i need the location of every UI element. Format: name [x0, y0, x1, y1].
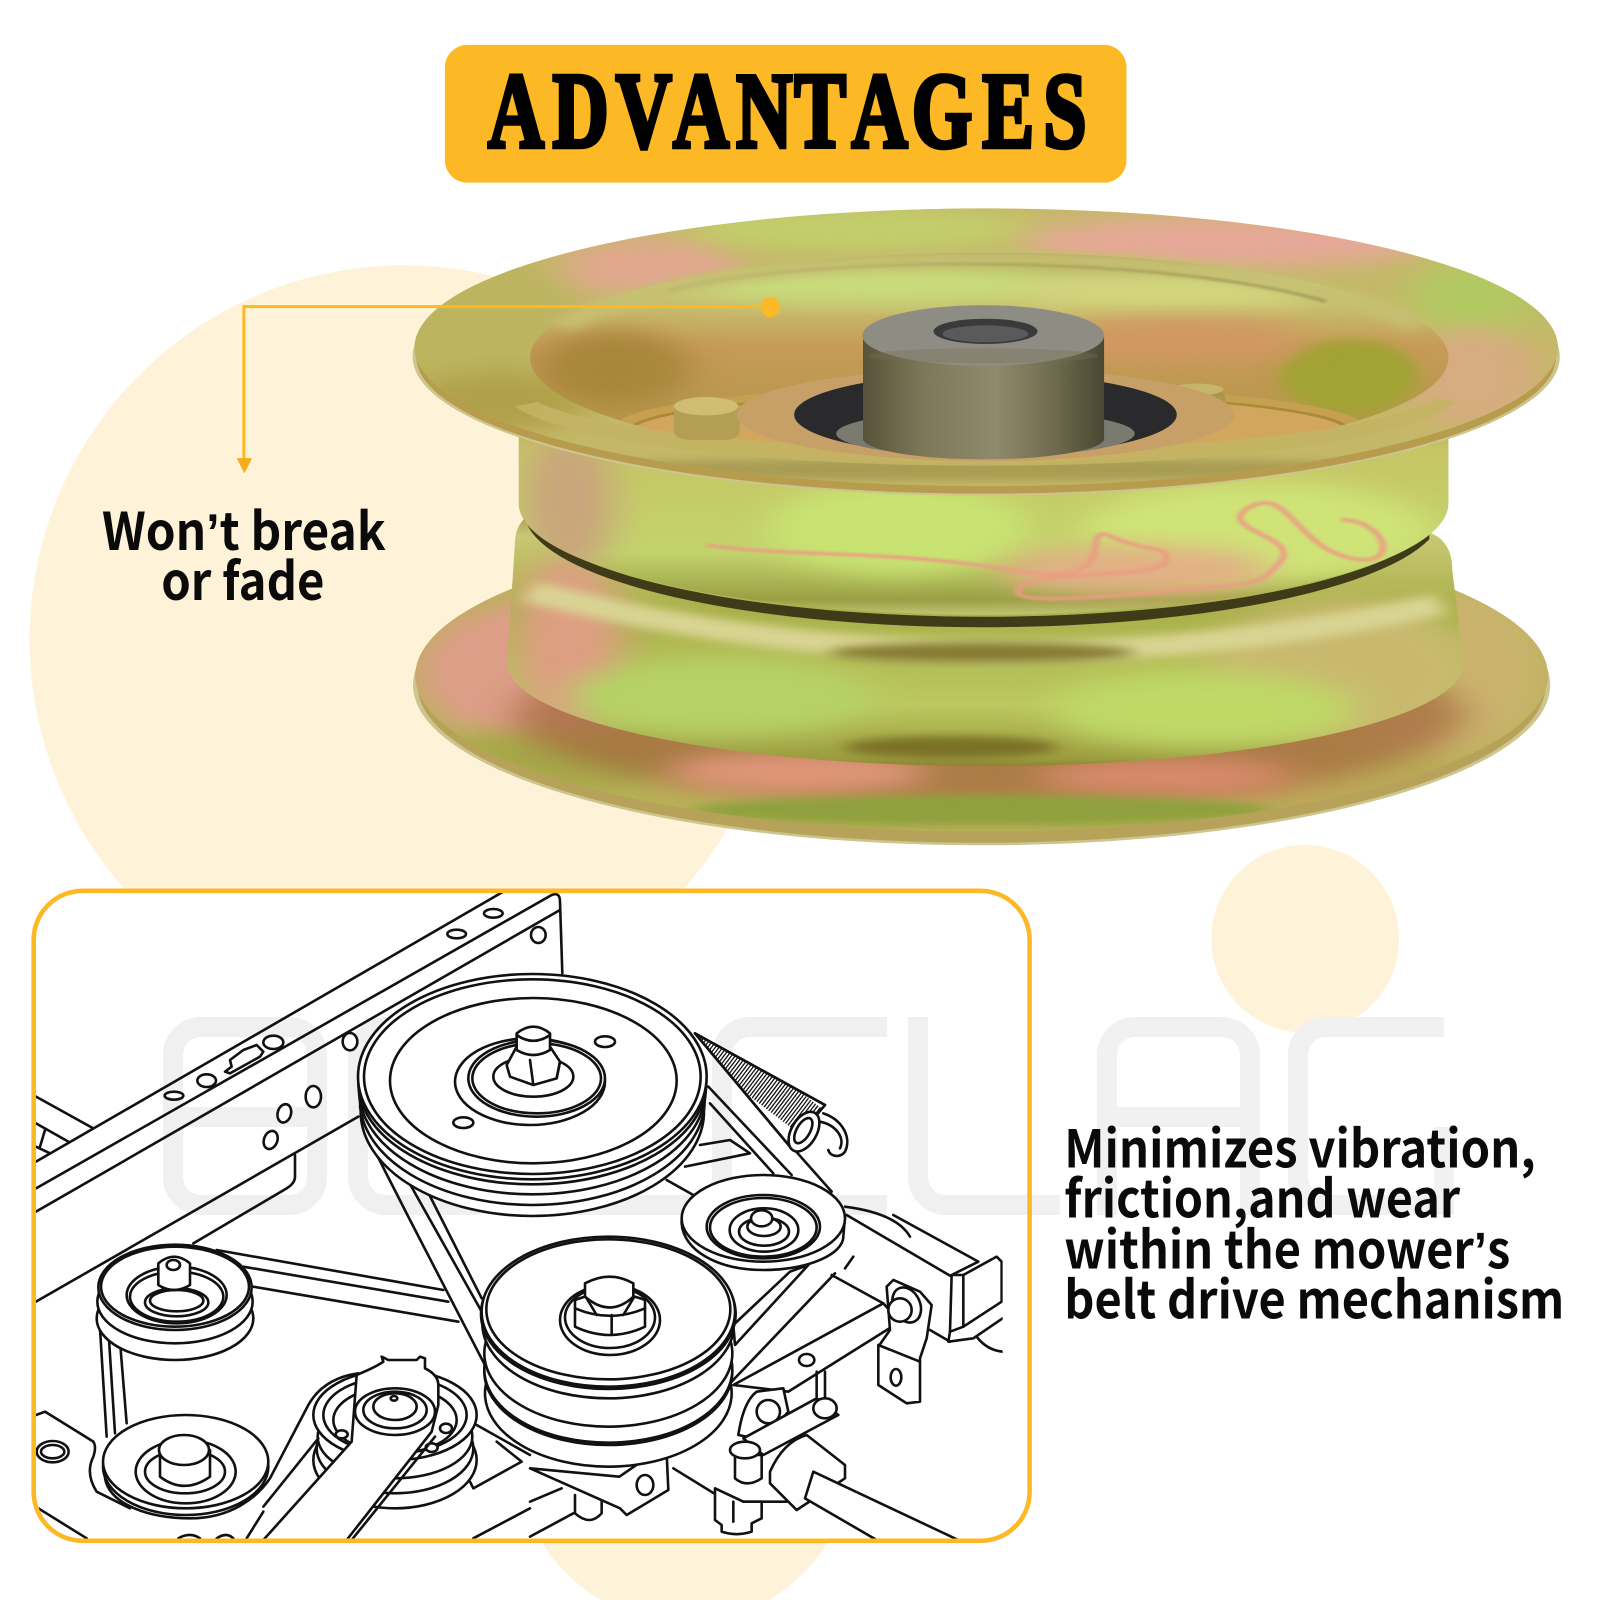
small idler pulley right [682, 1175, 845, 1270]
right square tube [832, 1215, 1003, 1352]
rivet: left [674, 397, 740, 440]
middle pulley [481, 1237, 736, 1389]
text: minimizes vibration: Minimizes vibration, [1064, 1107, 1536, 1182]
upper flange [392, 208, 1558, 495]
text: minimizes vibration [1064, 1107, 1564, 1333]
cross arm and bracket [733, 1280, 932, 1403]
bearing inner ring [836, 410, 1135, 457]
lower-left pulley [103, 1415, 268, 1515]
center bottom pulley and tension arm [263, 1357, 477, 1540]
gap shadow between halves [526, 514, 1429, 627]
lower flange [413, 588, 1550, 846]
hub cylinder [862, 305, 1104, 459]
watermark: pale logo shapes [173, 1017, 1444, 1215]
title text: ADVANTAGES [488, 52, 1087, 171]
belt behind small idler [708, 1087, 832, 1192]
panel border [34, 891, 1030, 1541]
lower pulley body [507, 520, 1464, 766]
mid right curved tube arc [845, 1207, 910, 1237]
diagram: mower deck pulleys and belts [36, 892, 1003, 1540]
panel: belt drive line drawing [34, 891, 1060, 1541]
deck rail and plate [36, 892, 750, 1302]
drive belt left [358, 1106, 484, 1365]
lower bracket, lever and rod [673, 1388, 958, 1540]
bearing housing [737, 368, 1234, 461]
background circle: bottom cream [517, 1288, 852, 1600]
spring [695, 1033, 847, 1157]
text: Won't break or fade [102, 490, 386, 615]
front gearbox bracket [530, 1453, 668, 1537]
background circle: large cream [30, 265, 779, 1014]
text: minimizes vibration: within the mower’s [1064, 1208, 1510, 1283]
callout leader line with dot and arrow [237, 297, 780, 473]
soft upper lip of the cup [561, 259, 1418, 326]
left long belt and left strap [98, 1250, 458, 1437]
top-left idler pulley [97, 1245, 253, 1360]
belt wrap to lower-left pulley [105, 1373, 358, 1518]
text: Won't break or fade: or fade [161, 540, 324, 615]
product photo: metal idler pulley [392, 208, 1558, 844]
large pulley stack [358, 974, 707, 1216]
upper pulley body [518, 437, 1448, 615]
bearing seal [794, 373, 1177, 456]
cup front rim highlight [515, 398, 1456, 466]
lower-left plate [36, 1412, 530, 1538]
rivet: right [1171, 384, 1225, 415]
background circle: small cream [1211, 845, 1399, 1033]
title badge [445, 45, 1127, 183]
cup interior [530, 252, 1448, 444]
lower sheave stack [481, 1325, 734, 1468]
belts right of middle pulley [733, 1265, 808, 1345]
text: Won't break or fade: Won’t break [102, 490, 386, 565]
text: minimizes vibration: friction,and wear [1064, 1157, 1460, 1232]
watermark inside panel [173, 1017, 1060, 1205]
